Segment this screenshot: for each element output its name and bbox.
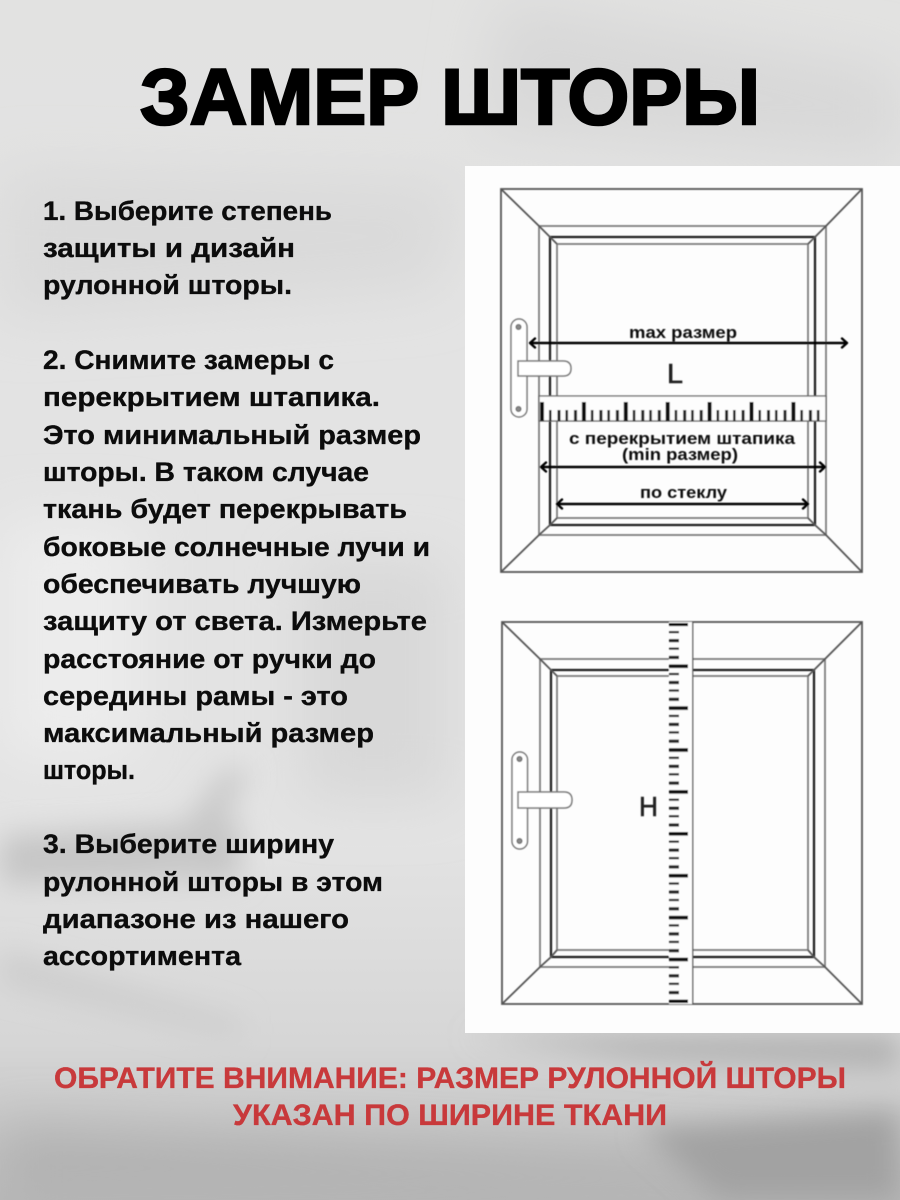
step 2: шторы. <box>43 755 135 785</box>
step 3: ассортимента <box>43 941 242 971</box>
label: L: L <box>667 358 683 389</box>
step 2: Это минимальный размер <box>43 420 421 450</box>
callout: important note <box>54 1061 846 1132</box>
arrow: max size <box>530 338 847 348</box>
label: H: H <box>639 791 658 822</box>
step 3: диапазоне из нашего <box>43 904 349 934</box>
icon: window handle <box>511 319 571 417</box>
ruler: vertical <box>669 622 693 1004</box>
step 1: защиты и дизайн <box>43 233 295 263</box>
step 2 <box>43 345 430 785</box>
title: ЗАМЕР ШТОРЫ <box>140 52 760 141</box>
step 2: максимальный размер <box>43 718 374 748</box>
step 2: шторы. В таком случае <box>43 457 369 487</box>
step 2: ткань будет перекрывать <box>43 494 407 524</box>
callout: important note: ОБРАТИТЕ ВНИМАНИЕ: РАЗМЕР РУЛОННОЙ ШТОРЫ <box>54 1061 846 1095</box>
step 2: перекрытием штапика. <box>43 382 380 412</box>
diagram: window width measurement <box>501 189 862 572</box>
window frame <box>501 189 862 572</box>
step 1: рулонной шторы. <box>43 270 292 300</box>
arrow: min size <box>541 462 825 472</box>
arrow: by glass <box>557 500 808 508</box>
step 3: 3. Выберите ширину <box>43 829 334 859</box>
panel: white diagrams background <box>465 166 900 1033</box>
step 2: расстояние от ручки до <box>43 644 376 674</box>
window frame <box>502 622 862 1004</box>
step 2: 2. Снимите замеры с <box>43 345 334 375</box>
label: overlap min size: (min размер) <box>622 446 738 464</box>
step 2: обеспечивать лучшую <box>43 569 361 599</box>
text block: instructions <box>43 196 430 971</box>
diagram: window height measurement <box>502 622 862 1004</box>
label: max size: max размер <box>629 324 737 342</box>
step 1: 1. Выберите степень <box>43 196 332 226</box>
step 2: боковые солнечные лучи и <box>43 532 430 562</box>
ruler: horizontal <box>539 396 826 421</box>
label: overlap min size: с перекрытием штапика <box>569 430 796 448</box>
icon: window handle <box>512 752 572 849</box>
step 2: середины рамы - это <box>43 681 348 711</box>
label: by glass: по стеклу <box>640 484 728 502</box>
callout: important note: УКАЗАН ПО ШИРИНЕ ТКАНИ <box>233 1099 667 1132</box>
step 1 <box>43 196 332 300</box>
step 2: защиту от света. Измерьте <box>43 606 427 636</box>
label: overlap min size <box>569 430 796 464</box>
step 3: рулонной шторы в этом <box>43 867 383 897</box>
step 3 <box>43 829 383 971</box>
